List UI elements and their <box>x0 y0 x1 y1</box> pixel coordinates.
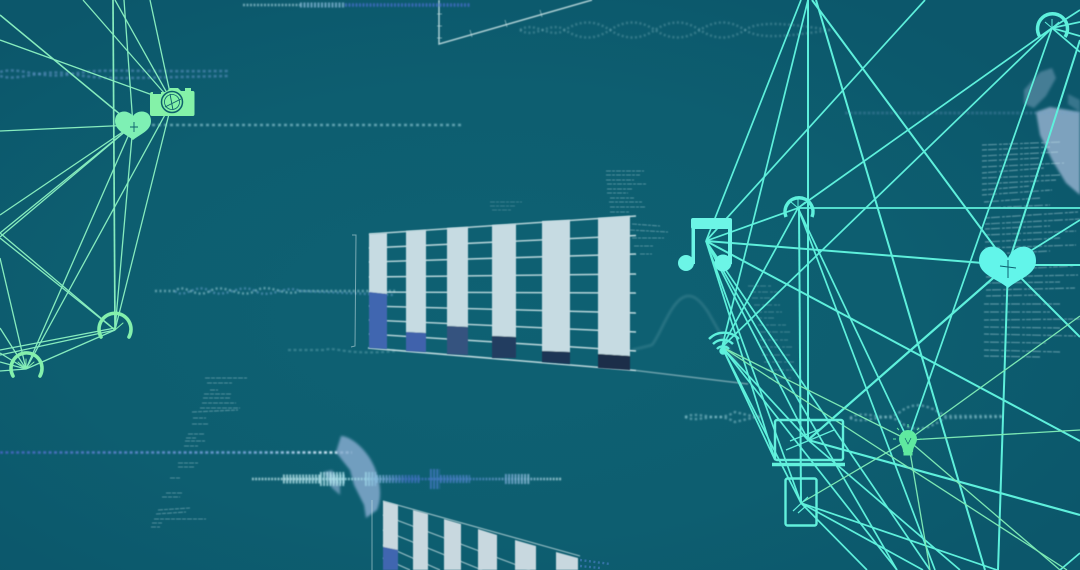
right network <box>678 0 1080 570</box>
icon: laptop <box>772 420 845 464</box>
code block: centre right <box>748 286 796 378</box>
bar 2 <box>406 230 426 352</box>
dotted signal: lower left <box>0 451 352 454</box>
bar 1 <box>369 233 387 349</box>
icon: tablet <box>786 478 816 526</box>
bars <box>383 501 578 570</box>
globe: lower centre <box>324 436 380 518</box>
axis <box>371 500 373 570</box>
code block: upper right <box>982 142 1080 357</box>
icon: heart <box>115 112 151 140</box>
lower bar chart <box>372 500 610 570</box>
icon: music note <box>678 218 732 272</box>
faint line chart behind network <box>632 296 742 372</box>
icon: light bulb <box>893 424 923 456</box>
waveform: top <box>243 4 470 6</box>
waveform: lower centre <box>252 478 562 480</box>
dots at right of lower chart <box>580 560 610 568</box>
icon: gauge right <box>99 313 131 337</box>
DNA pattern: upper centre <box>520 22 830 38</box>
main bar chart <box>351 216 748 384</box>
icon: gauge bottom <box>11 353 42 376</box>
icon: heart large <box>979 247 1036 288</box>
dotted signal: upper left <box>152 124 463 126</box>
bar 3 <box>447 227 468 355</box>
DNA pattern: centre left <box>155 288 395 295</box>
globe: upper right <box>1024 68 1080 195</box>
bar 6 <box>598 216 630 370</box>
DNA pattern: right of centre <box>685 405 1003 429</box>
connection lines: green <box>722 316 1080 570</box>
icon: wifi <box>709 333 739 354</box>
icon: gauge top right <box>1038 14 1068 37</box>
left network <box>0 0 194 376</box>
icon: camera <box>150 88 194 116</box>
icon: gauge centre <box>785 198 813 217</box>
connection lines <box>0 0 172 371</box>
connection lines: cyan <box>706 0 1080 570</box>
axis bracket <box>351 235 356 347</box>
bar 4 <box>492 224 516 358</box>
code block: lower left <box>151 378 247 527</box>
gridlines <box>369 216 636 351</box>
top line chart axes <box>437 0 592 44</box>
dotted signal: below centre left <box>288 349 395 352</box>
bar 5 <box>542 220 570 364</box>
baseline <box>368 348 748 384</box>
code block: above main chart <box>490 171 668 254</box>
gridlines <box>383 501 580 570</box>
dotted signal: upper right <box>845 112 1080 114</box>
dotted signal: top left <box>0 70 228 78</box>
